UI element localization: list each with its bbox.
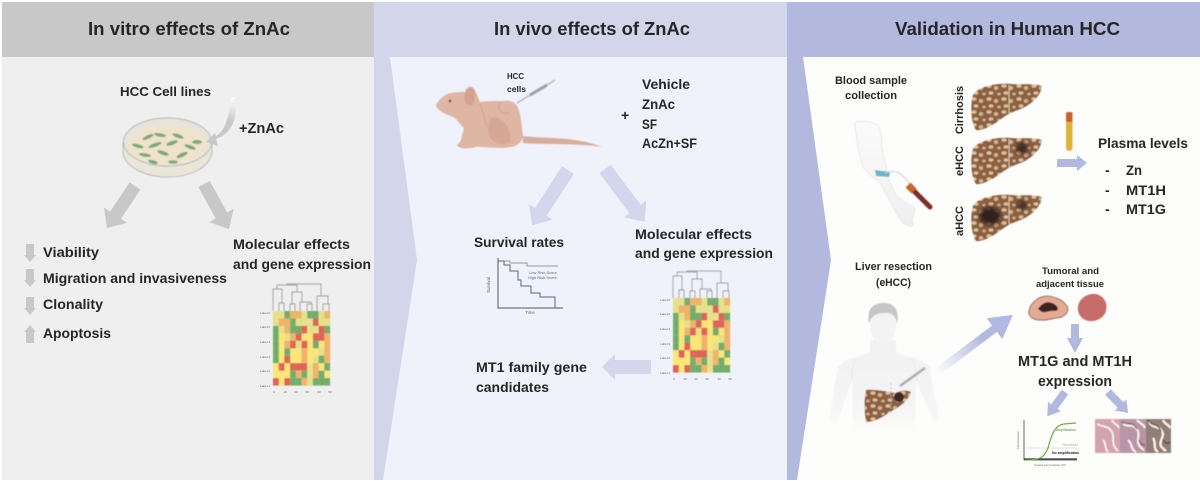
icon: arm with blood draw <box>855 121 930 226</box>
label: HCC cells: HCC <box>507 72 524 81</box>
label: migration and invasiveness: Migration and invasiveness <box>43 271 227 286</box>
label: molecular effects: Molecular effects <box>635 227 752 242</box>
chart: heatmap with dendrogram <box>660 271 732 381</box>
label: MT1 family gene candidates: candidates <box>476 380 549 395</box>
icon: cirrhotic liver <box>971 84 1042 130</box>
chart: heatmap with dendrogram: 20 <box>294 390 298 394</box>
header: in vitro <box>2 2 374 57</box>
label: HCC cells <box>507 72 527 94</box>
chart: survival curves: Low Risk Score <box>529 270 558 275</box>
list: plasma markers <box>1105 162 1166 217</box>
chart: survival curves: Time <box>525 310 535 315</box>
chart: qPCR amplification curve: No amplification <box>1052 451 1079 455</box>
chart: heatmap with dendrogram: 0 <box>273 390 275 394</box>
header: validation: Validation in Human HCC <box>895 19 1120 39</box>
label: plasma levels: Plasma levels <box>1098 135 1188 151</box>
chart: heatmap with dendrogram: Label 4 <box>260 340 270 344</box>
label: MT1 family gene candidates <box>476 360 588 395</box>
panel background: in vivo <box>374 57 787 480</box>
arrow: expression to qPCR <box>1041 387 1071 421</box>
list: treatments: ZnAc <box>642 96 675 112</box>
label: MT1G and MT1H expression: MT1G and MT1H <box>1018 353 1132 370</box>
list: plasma markers: MT1H <box>1126 182 1166 198</box>
label: HCC cell lines: HCC Cell lines <box>120 84 211 99</box>
chart: heatmap with dendrogram: 50 <box>328 390 332 394</box>
icon: plasma tube <box>1066 112 1072 151</box>
panel: validation in human HCC <box>787 2 1200 480</box>
chart: heatmap with dendrogram: Label 3 <box>260 355 270 359</box>
chart: survival curves: High Risk Score <box>528 275 557 280</box>
arrow: resection to tissue <box>929 304 1021 382</box>
header: in vivo: In vivo effects of ZnAc <box>494 19 690 39</box>
label: clonality: Clonality <box>43 297 104 312</box>
chart: heatmap with dendrogram: Label 5 <box>260 325 270 329</box>
label: viability: Viability <box>43 245 100 260</box>
label: MT1G and MT1H expression <box>1018 353 1132 390</box>
label: liver resection: (eHCC) <box>876 277 911 289</box>
icon: viability decrease <box>24 244 36 262</box>
icon: petri dish with cells <box>123 118 212 177</box>
chart: heatmap with dendrogram: 10 <box>683 377 687 381</box>
arrow: expression to IHC <box>1102 386 1134 418</box>
chart: qPCR amplification curve: Fluorescence <box>1016 431 1020 449</box>
list: treatments: Vehicle <box>642 76 690 92</box>
chevron: in vivo <box>374 57 417 480</box>
label: survival rates: Survival rates <box>474 235 564 250</box>
list: treatments <box>642 76 697 151</box>
chart: heatmap with dendrogram: Label 6 <box>260 311 270 315</box>
panel background: in vitro <box>2 57 374 480</box>
list: plasma markers: - <box>1105 201 1110 217</box>
label: apoptosis: Apoptosis <box>43 326 111 341</box>
arrow: dish to molecular effects <box>192 177 241 236</box>
list: plasma markers: - <box>1105 182 1110 198</box>
header: in vivo <box>374 2 787 57</box>
label: HCC cells: cells <box>507 85 527 94</box>
panel: in vivo effects <box>374 2 787 480</box>
icon: early HCC liver <box>971 138 1042 184</box>
icon: advanced HCC liver <box>971 195 1042 241</box>
chart: heatmap with dendrogram: Label 1 <box>660 371 670 375</box>
arrow: dish to phenotypes <box>95 178 147 236</box>
list: treatments: AcZn+SF <box>642 135 697 151</box>
image: IHC staining panels <box>1095 419 1171 453</box>
icon: nude mouse with syringe <box>436 80 602 148</box>
label: MT1 family gene candidates: MT1 family gene <box>476 360 588 375</box>
chart: qPCR amplification curve <box>1016 420 1079 467</box>
chart: heatmap with dendrogram: 40 <box>317 390 321 394</box>
label: tumoral and adjacent tissue <box>1036 266 1104 290</box>
chart: qPCR amplification curve: Amplification <box>1056 428 1076 432</box>
icon: apoptosis increase <box>24 325 36 343</box>
chart: heatmap with dendrogram: Label 2 <box>660 356 670 360</box>
label: molecular effects: and gene expression <box>635 246 773 261</box>
icon: tumoral tissue <box>1029 296 1068 320</box>
chart: survival curves <box>486 258 563 315</box>
panel: in vitro effects <box>2 2 374 480</box>
label: +ZnAc: +ZnAc <box>239 120 284 137</box>
label: molecular effects: Molecular effects <box>233 237 350 252</box>
header: in vitro: In vitro effects of ZnAc <box>88 19 290 39</box>
label: MT1G and MT1H expression: expression <box>1038 373 1112 390</box>
label: molecular effects: and gene expression <box>233 257 371 272</box>
chart: survival curves: Survival <box>486 277 491 293</box>
arrow: tissue to expression <box>1067 324 1083 353</box>
label: eHCC: eHCC <box>954 146 966 176</box>
panel background: validation <box>787 57 1200 480</box>
list: treatments: SF <box>642 116 657 132</box>
chart: heatmap with dendrogram: Label 2 <box>260 369 270 373</box>
label: blood sample collection <box>835 75 907 102</box>
label: tumoral and adjacent tissue: Tumoral and <box>1042 266 1099 277</box>
icon: human torso with liver <box>830 303 940 432</box>
label: cirrhosis: Cirrhosis <box>954 86 966 134</box>
arrow: mouse to survival <box>520 162 580 233</box>
chart: heatmap with dendrogram: Label 5 <box>660 312 670 316</box>
chart: qPCR amplification curve: Copies per reaction (Ct) <box>1034 463 1066 467</box>
chart: heatmap with dendrogram: Label 4 <box>660 327 670 331</box>
chart: heatmap with dendrogram: 0 <box>673 377 675 381</box>
chevron: validation <box>787 57 831 480</box>
label: tumoral and adjacent tissue: adjacent tissue <box>1036 279 1104 290</box>
arrow: heatmap to MT1 candidates <box>602 354 651 380</box>
header: validation <box>787 2 1200 57</box>
label: molecular effects <box>635 227 773 261</box>
arrow: to plasma levels <box>1057 155 1087 171</box>
chart: heatmap with dendrogram: 20 <box>694 377 698 381</box>
label: liver resection <box>855 261 932 289</box>
label: blood sample collection: Blood sample <box>835 75 907 87</box>
icon: adjacent tissue <box>1078 294 1107 321</box>
label: molecular effects <box>233 237 371 272</box>
list: plasma markers: Zn <box>1126 162 1142 178</box>
chart: qPCR amplification curve: Threshold <box>1062 443 1078 447</box>
chart: heatmap with dendrogram: 50 <box>728 377 732 381</box>
label: plus sign: + <box>621 107 629 123</box>
arrow: mouse to molecular effects <box>594 161 656 230</box>
icon: migration decrease <box>24 269 36 287</box>
chart: heatmap with dendrogram: Label 6 <box>660 298 670 302</box>
label: liver resection: Liver resection <box>855 261 932 273</box>
chart: heatmap with dendrogram: 30 <box>705 377 709 381</box>
list: plasma markers: MT1G <box>1126 201 1166 217</box>
label: blood sample collection: collection <box>845 90 897 102</box>
chart: heatmap with dendrogram: 40 <box>717 377 721 381</box>
chart: heatmap with dendrogram: 30 <box>305 390 309 394</box>
icon: clonality decrease <box>24 297 36 315</box>
chart: heatmap with dendrogram: Label 1 <box>260 384 270 388</box>
chart: heatmap with dendrogram: 10 <box>283 390 287 394</box>
chart: heatmap with dendrogram <box>260 284 332 394</box>
label: aHCC: aHCC <box>954 206 966 236</box>
list: plasma markers: - <box>1105 162 1110 178</box>
chart: heatmap with dendrogram: Label 3 <box>660 342 670 346</box>
arrow: ZnAc curved <box>206 97 236 146</box>
